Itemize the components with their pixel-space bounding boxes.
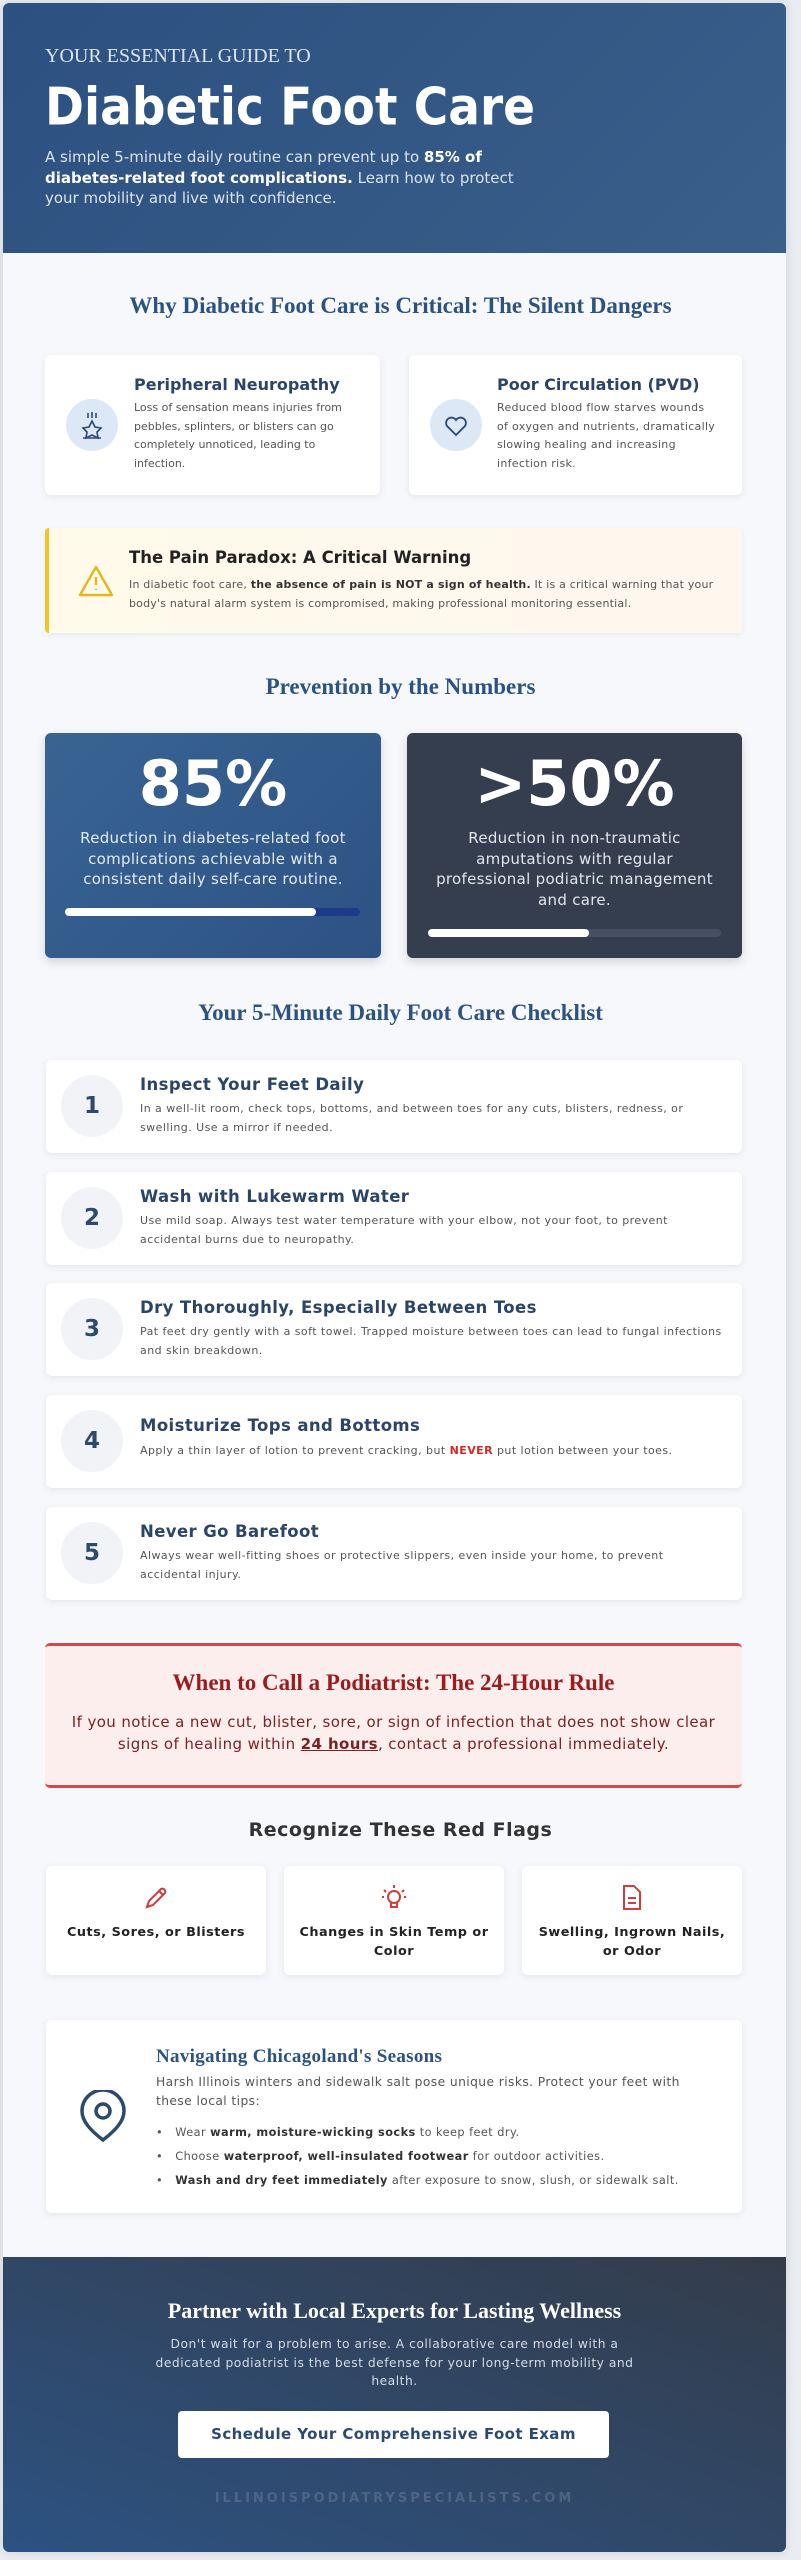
checklist item 3: Dry Thoroughly, Especially Between Toes <box>140 1298 537 1317</box>
panel: seasons <box>46 2020 742 2213</box>
stat card 85%: 85% <box>139 747 287 820</box>
tips list <box>156 2126 679 2187</box>
checklist item 1 <box>46 1060 742 1153</box>
header <box>3 3 786 253</box>
title: Navigating Chicagoland's Seasons <box>156 2046 442 2067</box>
icon: neuropathy <box>66 399 118 451</box>
bar <box>65 908 360 916</box>
button: Schedule Your Comprehensive Foot Exam <box>211 2425 576 2443</box>
text: Harsh Illinois winters and sidewalk salt pose unique risks. Protect your feet with these local tips: <box>156 2075 680 2108</box>
card: circulation <box>409 355 742 495</box>
text: infection risk. <box>497 457 576 470</box>
footer CTA <box>3 2257 786 2552</box>
footer CTA: Partner with Local Experts for Lasting Wellness <box>168 2298 621 2323</box>
tips list: • Wear warm, moisture-wicking socks to keep feet dry. <box>156 2126 520 2139</box>
checklist item 3: 3 <box>84 1316 100 1342</box>
checklist item 4: Moisturize Tops and Bottoms <box>140 1416 420 1435</box>
callout: 24-hour rule <box>45 1643 742 1788</box>
checklist item 3: Pat feet dry gently with a soft towel. Trapped moisture between toes can lead to fungal infections and skin breakdown. <box>140 1325 722 1357</box>
flag: cuts: Cuts, Sores, or Blisters <box>67 1925 245 1940</box>
flag: temp <box>284 1866 504 1975</box>
heading: red flags: Recognize These Red Flags <box>249 1819 552 1841</box>
text: In diabetic foot care, the absence of pain is NOT a sign of health. It is a critical warning that your body's natural alarm system is compromised, making professional monitoring essential. <box>129 578 713 610</box>
tips list: • Wash and dry feet immediately after exposure to snow, slush, or sidewalk salt. <box>156 2174 679 2187</box>
flag: cuts <box>46 1866 266 1975</box>
kicker: YOUR ESSENTIAL GUIDE TO <box>45 45 311 67</box>
callout: 24-hour rule: If you notice a new cut, blister, sore, or sign of infection that does not show clear signs of healing within 24 hours, contact a professional immediately. <box>72 1713 715 1753</box>
heading: silent dangers: Why Diabetic Foot Care is Critical: The Silent Dangers <box>129 293 672 318</box>
title: Poor Circulation (PVD) <box>497 375 700 394</box>
checklist item 5: Always wear well-fitting shoes or protective slippers, even inside your home, to prevent accidental injury. <box>140 1549 663 1581</box>
checklist item 1: Inspect Your Feet Daily <box>140 1075 364 1094</box>
stat card 50%: >50% <box>474 747 675 820</box>
bar <box>428 929 721 937</box>
heading: numbers: Prevention by the Numbers <box>266 674 535 699</box>
heading: checklist: Your 5-Minute Daily Foot Care Checklist <box>198 1000 603 1025</box>
text: of oxygen and nutrients, dramatically <box>497 420 715 433</box>
subtitle: A simple 5-minute daily routine can prevent up to 85% of diabetes-related foot complications. Learn how to protect your mobility and live with confidence. <box>45 148 514 207</box>
checklist item 2: Use mild soap. Always test water temperature with your elbow, not your foot, to prevent accidental burns due to neuropathy. <box>140 1214 668 1246</box>
checklist item 2: 2 <box>84 1205 100 1231</box>
flag: temp: Changes in Skin Temp or Color <box>299 1925 489 1959</box>
text: Reduced blood flow starves wounds <box>497 401 704 414</box>
checklist item 4: 4 <box>84 1428 100 1454</box>
text: slowing healing and increasing <box>497 438 676 451</box>
icon: location pin <box>80 2090 126 2142</box>
title: Diabetic Foot Care <box>45 77 535 138</box>
icon: warning <box>78 566 114 596</box>
checklist item 4 <box>46 1395 742 1488</box>
footer CTA: Don't wait for a problem to arise. A collaborative care model with a dedicated podiatrist is the best defense for your long-term mobility and health. <box>156 2337 633 2388</box>
stat card 50%: Reduction in non-traumatic amputations with regular professional podiatric management and care. <box>436 829 713 908</box>
card: neuropathy <box>45 355 380 495</box>
stat card 50% <box>407 733 742 958</box>
checklist item 4: Apply a thin layer of lotion to prevent cracking, but NEVER put lotion between your toes. <box>140 1444 672 1457</box>
checklist item 5 <box>46 1507 742 1600</box>
text: Loss of sensation means injuries from pebbles, splinters, or blisters can go completely unnoticed, leading to infection. <box>134 401 342 470</box>
stat card 85% <box>45 733 381 958</box>
flag: swelling <box>522 1866 742 1975</box>
checklist item 5: Never Go Barefoot <box>140 1522 319 1541</box>
checklist item 2 <box>46 1172 742 1265</box>
title: The Pain Paradox: A Critical Warning <box>129 548 471 567</box>
checklist item 1: In a well-lit room, check tops, bottoms, and between toes for any cuts, blisters, redness, or swelling. Use a mirror if needed. <box>140 1102 683 1134</box>
checklist item 2: Wash with Lukewarm Water <box>140 1187 409 1206</box>
callout: pain paradox <box>45 528 742 633</box>
url: ILLINOISPODIATRYSPECIALISTS.COM <box>215 2491 574 2506</box>
flag: swelling: Swelling, Ingrown Nails, or Odor <box>539 1925 725 1959</box>
stat card 85%: Reduction in diabetes-related foot complications achievable with a consistent daily self-care routine. <box>80 829 346 888</box>
title: Peripheral Neuropathy <box>134 375 340 394</box>
button <box>178 2411 609 2458</box>
checklist item 5: 5 <box>84 1540 100 1566</box>
icon: heart <box>430 399 482 451</box>
text <box>497 401 715 470</box>
checklist item 3 <box>46 1283 742 1376</box>
tips list: • Choose waterproof, well-insulated footwear for outdoor activities. <box>156 2150 605 2163</box>
callout: 24-hour rule: When to Call a Podiatrist: The 24-Hour Rule <box>173 1670 614 1695</box>
checklist item 1: 1 <box>84 1093 100 1119</box>
